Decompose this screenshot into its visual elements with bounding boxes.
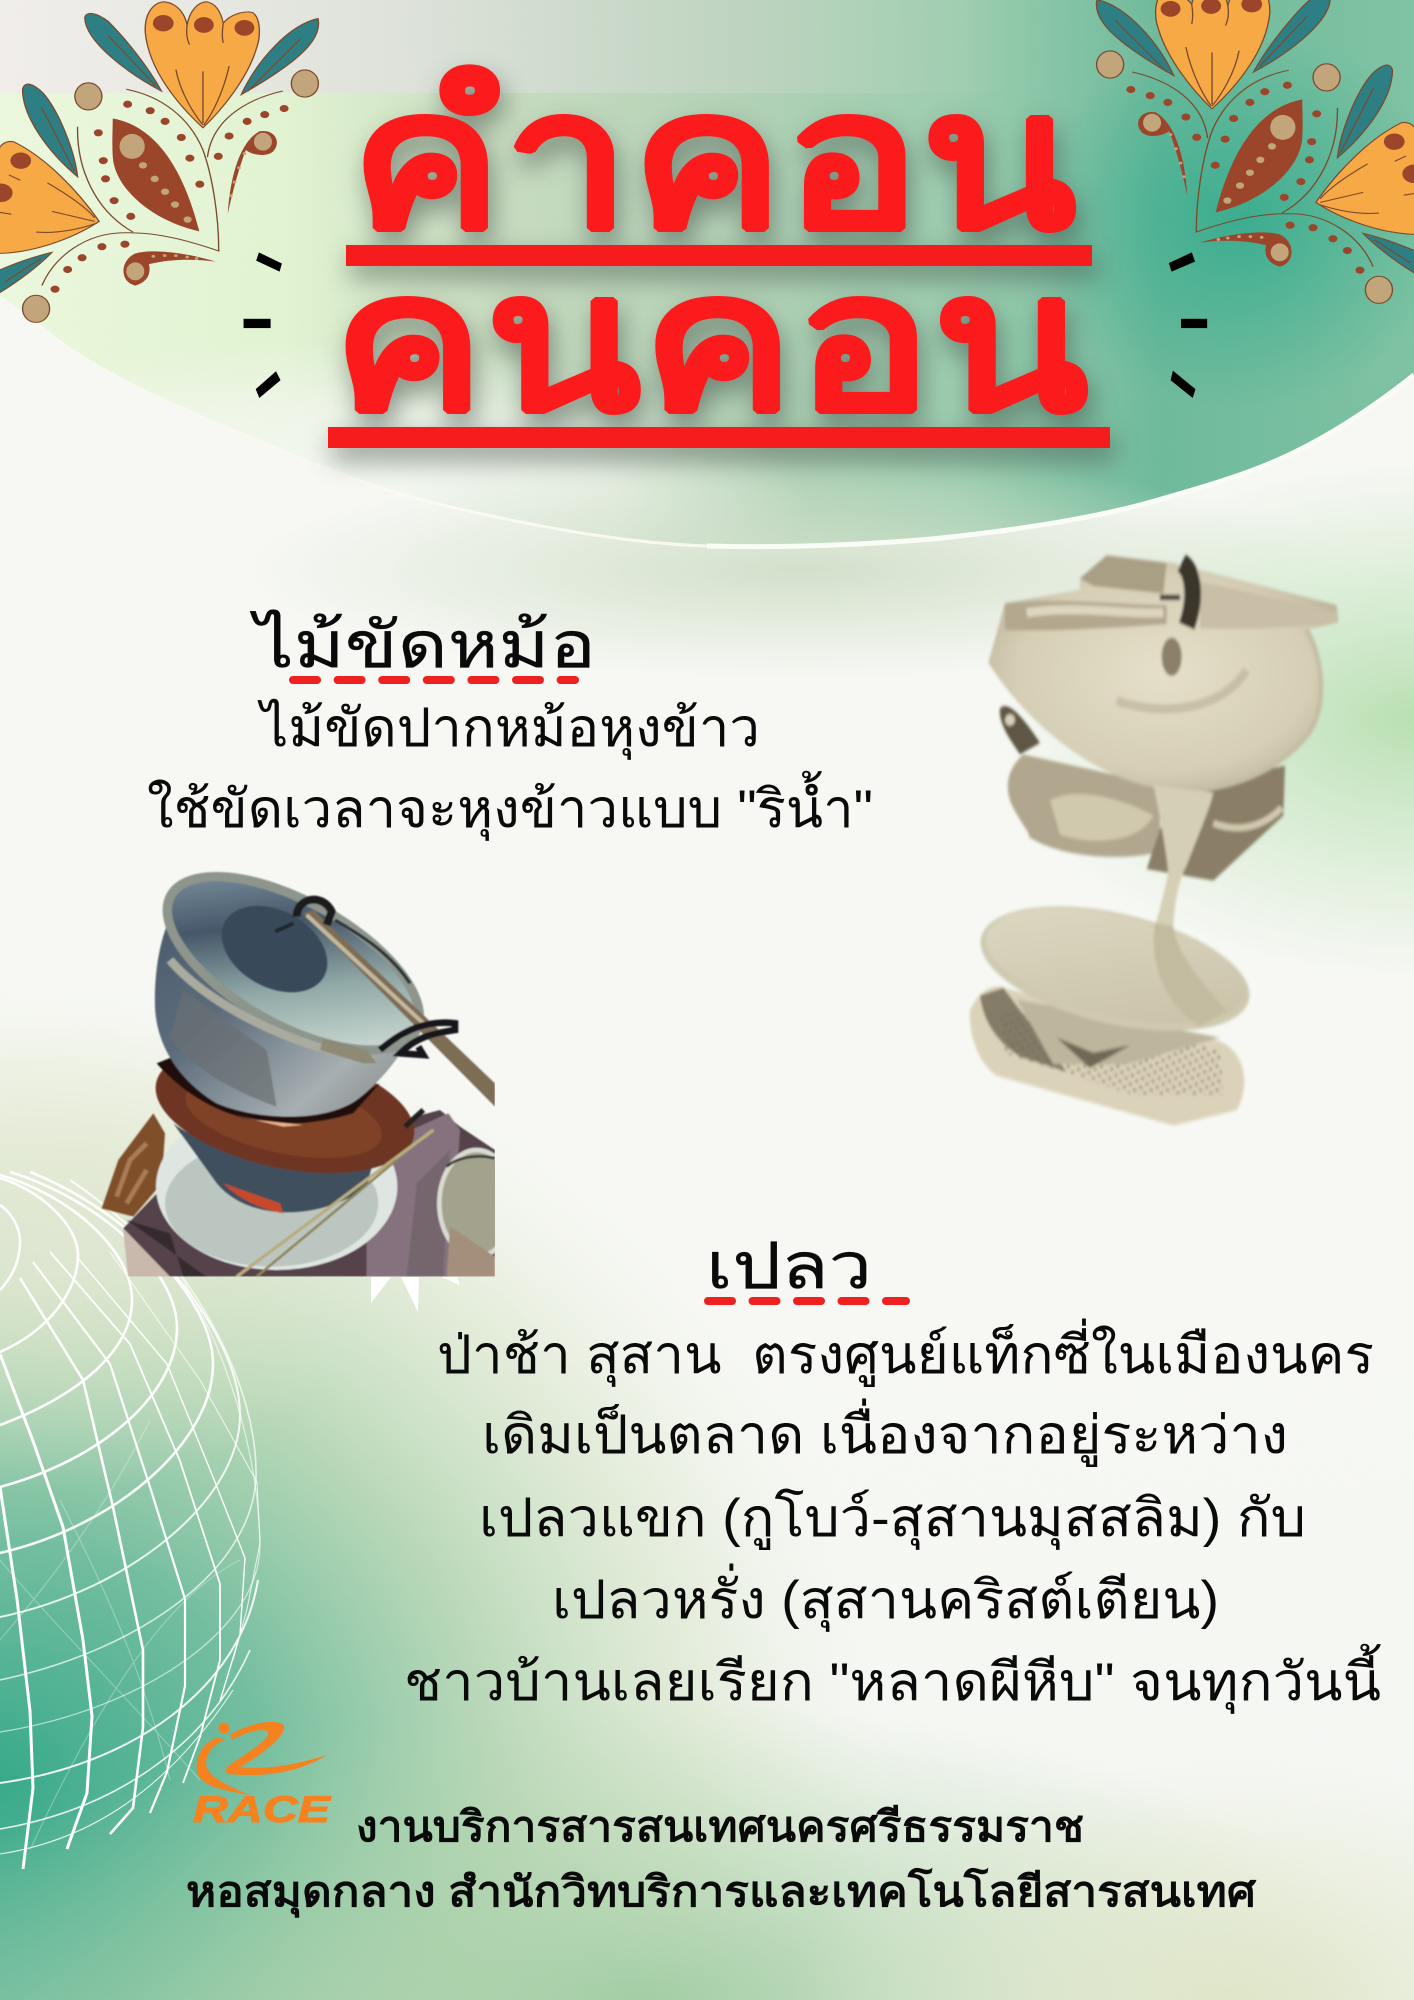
description: pleo: ป่าช้า สุสาน ตรงศูนย์แท็กซี่ในเมืองนคร [437, 1318, 1374, 1387]
description: mai khat mo [147, 698, 873, 841]
red dashed underline [708, 1297, 906, 1305]
description: mai khat mo: ไม้ขัดปากหม้อหุงข้าว [257, 698, 760, 760]
description: pleo: เดิมเป็นตลาด เนื่องจากอยู่ระหว่าง [482, 1398, 1288, 1467]
footer credits: หอสมุดกลาง สำนักวิทบริการและเทคโนโลยีสารสนเทศ [186, 1867, 1257, 1918]
sparkle dashes: left [244, 252, 282, 398]
logo: RACE: RACE [193, 1789, 332, 1830]
red dashed underline [293, 676, 575, 684]
description: pleo [404, 1318, 1381, 1714]
flower ornament: top left [0, 2, 319, 322]
description: pleo: ชาวบ้านเลยเรียก "หลาดผีหีบ" จนทุกวันนี้ [404, 1644, 1381, 1714]
flower ornament: top right [1096, 0, 1414, 303]
heading: pleo: เปลว [706, 1230, 872, 1302]
logo: RACE [193, 1722, 332, 1830]
title: คำคอน [354, 64, 1081, 283]
white star fragments [371, 1277, 460, 1312]
footer credits [186, 1803, 1257, 1918]
title line 1: คำคอน [350, 51, 1077, 270]
description: pleo: เปลวหรั่ง (สุสานคริสต์เตียน) [552, 1563, 1219, 1632]
description: mai khat mo: ใช้ขัดเวลาจะหุงข้าวแบบ "ริน้ำ" [147, 771, 873, 841]
photo: pot on clay stove [100, 871, 495, 1277]
title: คนคอน [336, 246, 1093, 465]
title [328, 51, 1114, 465]
title underline 1 [346, 245, 1092, 266]
heading: mai khat mo: ไม้ขัดหม้อ [249, 609, 596, 681]
globe wireframe [0, 1172, 260, 1869]
photo: rice water pouring into bowl [970, 555, 1338, 1126]
sparkle dashes: right [1169, 252, 1207, 398]
description: pleo: เปลวแขก (กูโบว์-สุสานมุสสลิม) กับ [479, 1488, 1306, 1550]
footer credits: งานบริการสารสนเทศนครศรีธรรมราช [356, 1803, 1084, 1850]
title line 2: คนคอน [332, 233, 1089, 452]
title underline 2 [328, 427, 1110, 448]
